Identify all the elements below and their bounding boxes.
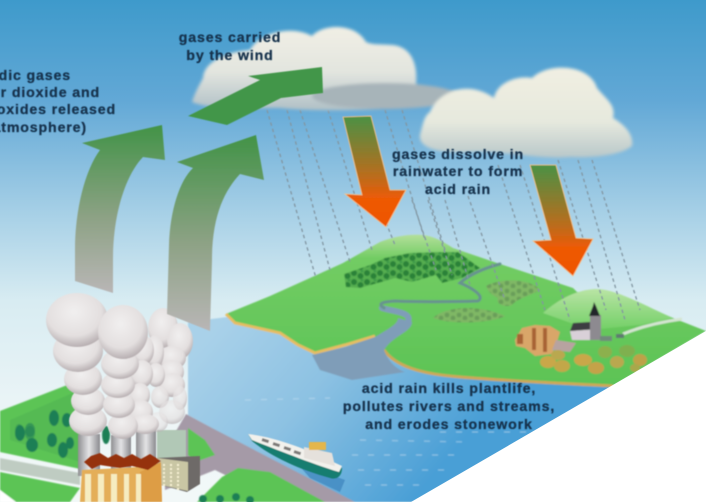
label: acid rain effects: and erodes stonework [365,417,533,433]
label: gases dissolve in rainwater: gases dissolve in [392,147,524,163]
rising arrow right [167,135,264,331]
road near church [623,319,682,334]
factory [80,453,200,502]
foreground green patch [197,468,325,502]
church [570,302,624,341]
down arrow right [530,165,593,276]
front smoke plumes [46,293,159,439]
river [381,264,500,322]
cloud 1 [192,27,458,110]
label: acid rain effects: pollutes rivers and streams, [343,399,555,415]
cloud 2 [420,68,632,158]
bottom right white corner [411,331,706,502]
rising arrow left [75,125,165,293]
land: headland and hill [226,235,706,386]
ship [248,434,345,492]
back smoke plumes [146,308,193,432]
label: acid rain effects: acid rain kills plantlife, [362,381,536,397]
faded forest patches [433,280,540,322]
down arrow middle [343,116,406,227]
scene: ground plane [0,235,706,502]
back building [157,456,200,492]
label: gases carried by the wind: by the wind [186,48,274,64]
far small hill [543,289,673,330]
label: gases dissolve in rainwater: rainwater to form [393,164,523,180]
forest on hill [344,252,480,288]
water [188,316,620,502]
left land with trees [0,382,110,502]
main building [80,453,162,502]
label: gases dissolve in rainwater: acid rain [425,182,491,198]
orchard [540,345,647,374]
green patch by the factory [188,428,215,462]
chimney stacks [78,428,186,476]
road and quay [165,414,355,502]
label: gases carried by the wind: gases carried [179,30,281,46]
village houses [515,325,576,356]
rain lines [267,110,640,320]
wind arrow [188,67,323,125]
river estuary [312,318,412,380]
